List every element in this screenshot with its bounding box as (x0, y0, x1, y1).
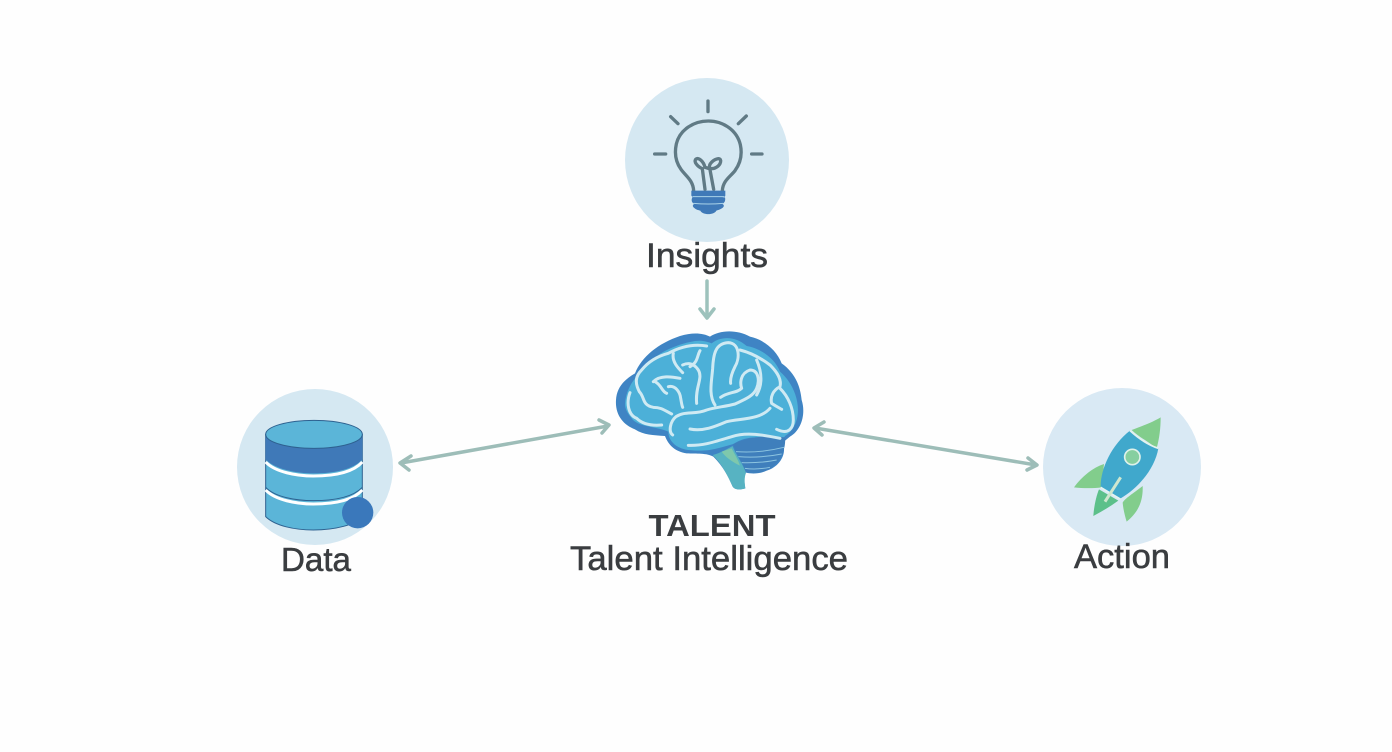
icon: action rocket (1043, 388, 1201, 546)
heading: TALENT: TALENT (648, 508, 776, 543)
arrow: insights to brain (700, 281, 714, 318)
arrow: brain to data (double-headed) (400, 420, 609, 470)
label: Data: Data (281, 541, 352, 578)
arrow: brain to action (double-headed) (814, 422, 1037, 470)
heading: Talent Intelligence: Talent Intelligence (570, 540, 848, 578)
icon: brain (616, 331, 803, 489)
icon: insights lightbulb (625, 78, 789, 242)
icon: data cylinder (237, 389, 393, 545)
label: Action: Action (1074, 538, 1170, 576)
heading: Insights: Insights (646, 237, 768, 275)
